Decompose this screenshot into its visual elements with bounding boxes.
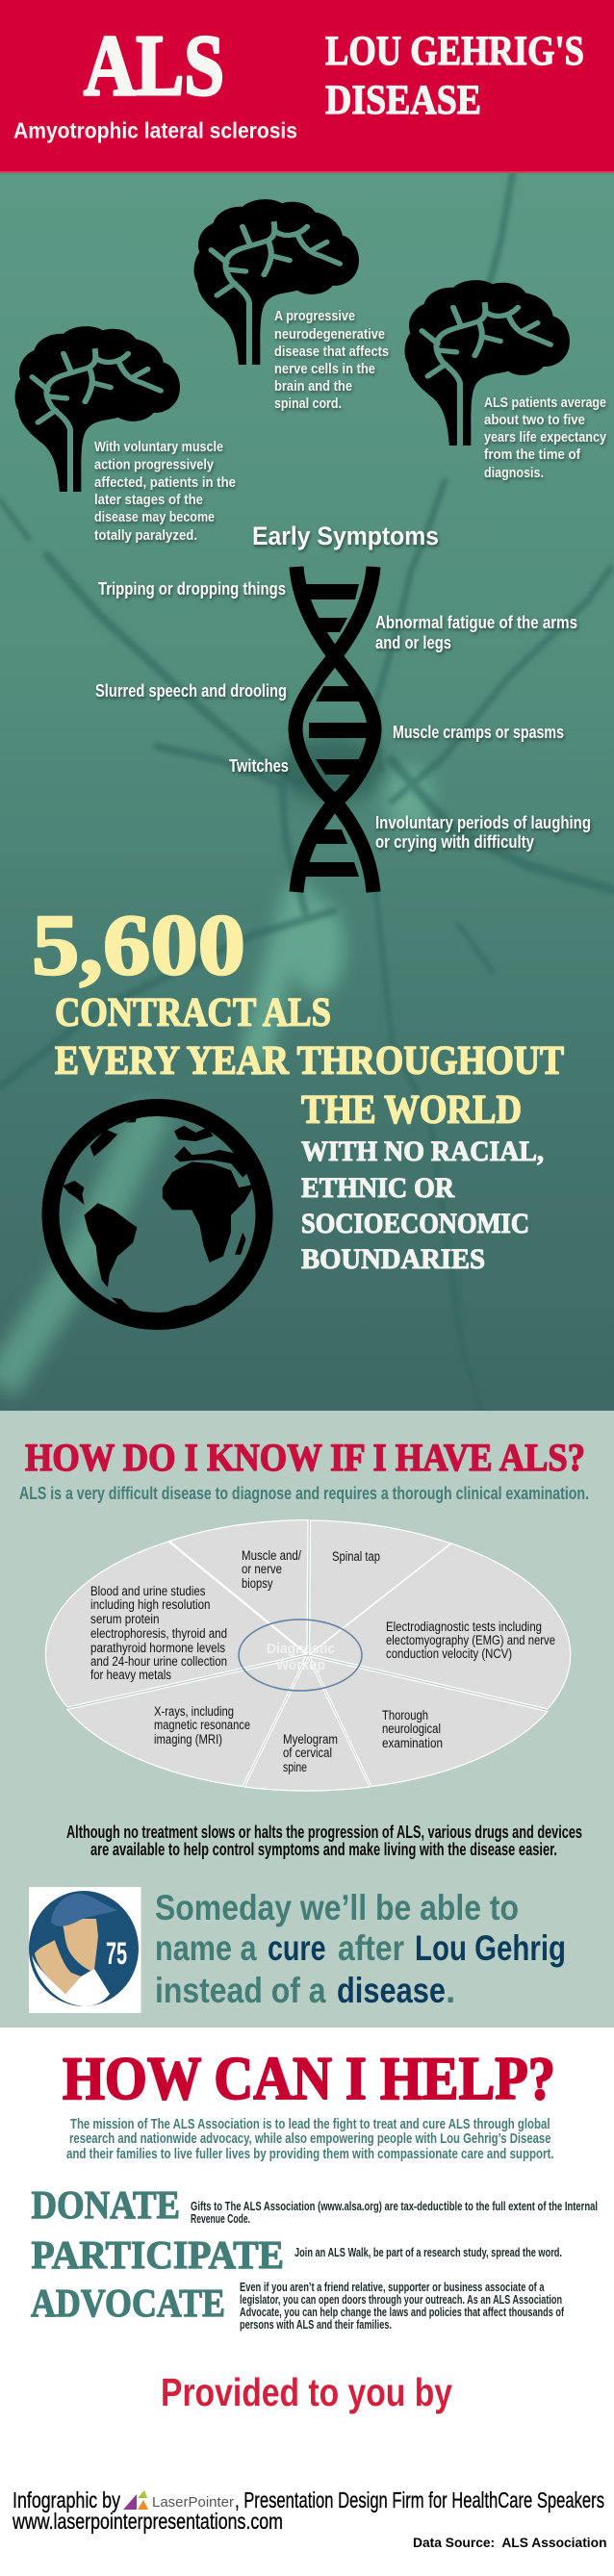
icon: brain right <box>405 280 570 446</box>
slice: myelogram: Myelogram <box>283 1732 338 1747</box>
hub: diagnostic workup: Diagnostic <box>267 1641 335 1657</box>
heading: how can I help: HOW CAN I HELP? <box>63 2045 555 2112</box>
list: early symptom labels: or crying with difficulty <box>375 831 535 852</box>
text: voluntary muscle action: action progressively <box>94 456 215 473</box>
slice: neurological examination <box>310 1657 548 1786</box>
slice: spinal tap: Spinal tap <box>332 1549 380 1564</box>
action: advocate <box>31 2280 564 2332</box>
icon: Lou Gehrig 75th logo: 75 <box>106 1936 127 1971</box>
panel: diagnosis section <box>0 1411 614 2028</box>
credit: data source: Data Source: ALS Association <box>413 2535 606 2550</box>
text: voluntary muscle action: totally paralyzed. <box>94 527 197 544</box>
text: progressive disease: nerve cells in the <box>274 361 375 377</box>
text: mission statement <box>66 2116 554 2162</box>
text: progressive disease: spinal cord. <box>274 395 342 412</box>
credit: infographic by LaserPointer: LaserPointer <box>152 2494 234 2511</box>
stat text: contract ALS: CONTRACT ALS <box>55 991 331 1035</box>
panel: teal neuron background <box>0 171 614 1411</box>
list: early symptom labels: Muscle cramps or spasms <box>393 722 564 742</box>
list: early symptom labels: Twitches <box>229 755 289 776</box>
slice: electrodiagnostic tests: conduction velocity (NCV) <box>386 1646 512 1661</box>
list: early symptom labels: Tripping or dropping things <box>98 578 286 599</box>
slice: blood and urine: serum protein <box>90 1612 160 1626</box>
icon: brain center <box>194 199 359 366</box>
quote: someday a cure: Someday we’ll be able to <box>155 1888 519 1927</box>
text: life expectancy: about two to five <box>484 412 585 428</box>
text: progressive disease: disease that affects <box>274 344 389 360</box>
slice: muscle biopsy <box>169 1520 308 1653</box>
subtitle: Amyotrophic lateral sclerosis <box>13 117 297 142</box>
slice: electrodiagnostic tests: Electrodiagnostic tests including <box>386 1620 542 1634</box>
credit: infographic by LaserPointer <box>12 2487 604 2534</box>
list: early symptom labels: Slurred speech and drooling <box>95 680 287 701</box>
slice: muscle biopsy: biopsy <box>242 1576 273 1591</box>
text: voluntary muscle action <box>94 439 236 544</box>
slice: blood and urine: for heavy metals <box>90 1668 171 1682</box>
icon: brain left <box>15 326 180 493</box>
text: voluntary muscle action: later stages of the <box>94 492 203 508</box>
heading: provided to you by: Provided to you by <box>161 2370 452 2414</box>
quote: someday a cure: after <box>338 1928 404 1968</box>
text: no boundaries: ETHNIC OR <box>301 1172 454 1204</box>
stat: 5,600: 5,600 <box>32 898 245 993</box>
slice: x-rays: X-rays, including <box>154 1704 234 1719</box>
quote: someday a cure: name a <box>155 1928 257 1968</box>
stat text: contract ALS: EVERY YEAR THROUGHOUT <box>55 1039 564 1084</box>
slice: neurological examination: neurological <box>382 1722 441 1736</box>
quote: someday a cure: disease <box>337 1971 446 2010</box>
text: voluntary muscle action: affected, patients in the <box>94 474 236 491</box>
list: early symptom labels <box>95 578 591 852</box>
slice: myelogram <box>244 1657 370 1791</box>
slice: muscle biopsy: or nerve <box>242 1562 282 1576</box>
action: donate <box>31 2182 598 2227</box>
slice: electrodiagnostic tests <box>310 1543 571 1709</box>
action: donate: Revenue Code. <box>191 2211 250 2226</box>
icon: globe <box>50 1108 264 1325</box>
slice: x-rays: magnetic resonance <box>154 1718 250 1732</box>
text: treatment note <box>66 1823 582 1859</box>
hub: diagnostic workup <box>239 1620 362 1691</box>
title: ALS: ALS <box>84 18 224 114</box>
slice: myelogram: of cervical <box>283 1746 332 1760</box>
action: participate: PARTICIPATE <box>31 2232 284 2277</box>
text: no boundaries <box>301 1135 544 1275</box>
text: life expectancy: from the time of <box>484 446 581 463</box>
list: early symptom labels: and or legs <box>375 632 451 652</box>
action: donate: DONATE <box>31 2182 180 2227</box>
text: progressive disease: A progressive <box>274 308 355 324</box>
slice: blood and urine <box>45 1542 306 1707</box>
credit: infographic by LaserPointer: www.laserpointerpresentations.com <box>12 2509 283 2534</box>
quote: someday a cure: Lou Gehrig <box>415 1928 566 1968</box>
text: life expectancy: diagnosis. <box>484 465 544 481</box>
hub: diagnostic workup: Workup <box>276 1657 325 1673</box>
title: Disease: DISEASE <box>325 78 481 123</box>
slice: spinal tap <box>310 1520 450 1654</box>
text: life expectancy <box>484 395 607 481</box>
slice: blood and urine: parathyroid hormone levels <box>90 1641 225 1655</box>
action: advocate: ADVOCATE <box>31 2281 225 2325</box>
icon: DNA helix <box>295 567 374 892</box>
text: no boundaries: BOUNDARIES <box>301 1243 485 1275</box>
heading: early symptoms: Early Symptoms <box>252 522 439 550</box>
text: progressive disease <box>274 308 389 412</box>
action: advocate: persons with ALS and their families. <box>240 2317 392 2332</box>
text: progressive disease: brain and the <box>274 378 352 395</box>
quote: someday a cure: instead of a <box>155 1971 326 2010</box>
text: voluntary muscle action: disease may become <box>94 509 215 525</box>
icon: Lou Gehrig 75th logo <box>29 1887 141 2013</box>
slice: blood and urine: and 24-hour urine collection <box>90 1654 227 1669</box>
slice: muscle biopsy: Muscle and/ <box>242 1548 301 1563</box>
slice: neurological examination: Thorough <box>382 1708 428 1722</box>
stat text: contract ALS <box>55 991 564 1133</box>
slice: blood and urine: including high resolution <box>90 1597 210 1612</box>
chart: diagnostic workup pie <box>45 1520 571 1791</box>
icon: LaserPointer logo <box>123 2490 148 2510</box>
slice: neurological examination: examination <box>382 1736 443 1750</box>
slice: blood and urine: Blood and urine studies <box>90 1584 206 1598</box>
stat text: contract ALS: THE WORLD <box>301 1088 522 1133</box>
slice: x-rays: imaging (MRI) <box>154 1732 222 1747</box>
text: progressive disease: neurodegenerative <box>274 326 385 343</box>
quote: someday a cure <box>155 1888 566 2010</box>
text: no boundaries: WITH NO RACIAL, <box>301 1135 544 1167</box>
quote: someday a cure: . <box>446 1971 455 2010</box>
text: no boundaries: SOCIOECONOMIC <box>301 1208 529 1239</box>
credit: infographic by LaserPointer: Infographic by <box>13 2487 120 2512</box>
slice: x-rays <box>67 1657 306 1786</box>
text: voluntary muscle action: With voluntary muscle <box>94 439 223 455</box>
slice: blood and urine: electrophoresis, thyroid and <box>90 1626 227 1641</box>
action: participate <box>31 2232 562 2277</box>
slice: electrodiagnostic tests: electomyography (EMG) and nerve <box>386 1633 555 1647</box>
quote: someday a cure: cure <box>268 1928 325 1968</box>
panel: red header <box>0 0 614 173</box>
slice: myelogram: spine <box>283 1760 307 1774</box>
